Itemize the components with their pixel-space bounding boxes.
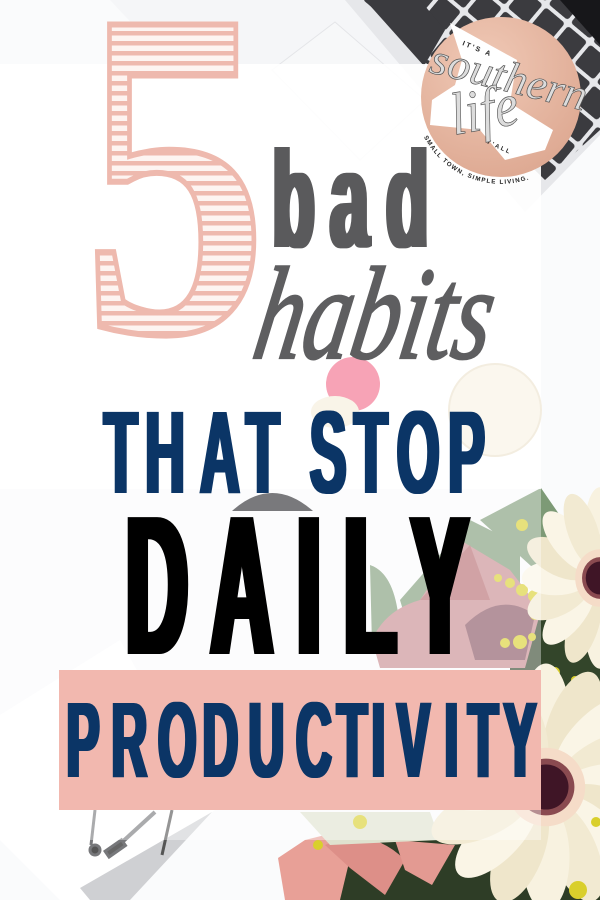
state silhouette <box>430 23 553 160</box>
notebook lower left <box>0 640 215 900</box>
banner background <box>59 670 541 810</box>
laptop body <box>272 0 600 212</box>
cup <box>449 364 541 456</box>
pink lilies bottom <box>278 812 455 900</box>
yellow accents <box>313 815 600 899</box>
logo text: southern <box>426 34 593 120</box>
laptop keyboard <box>362 0 600 180</box>
macaron <box>326 357 380 411</box>
large gerbera <box>423 664 600 900</box>
leaves <box>370 488 570 668</box>
macaron cream <box>311 396 359 428</box>
yellow goldenrod <box>494 519 579 684</box>
translucent white overlay <box>0 64 541 840</box>
dark foliage right <box>510 600 600 700</box>
pink flowers <box>372 540 541 668</box>
word: bad: bad <box>272 123 428 277</box>
overlay inner whitening upper <box>0 64 541 489</box>
logo circle <box>421 17 581 177</box>
logo text: SMALL TOWN, SIMPLE LIVING. <box>424 136 528 184</box>
logo text: Y'ALL <box>485 139 512 156</box>
grey mug <box>232 493 313 511</box>
word: habits script: habits <box>245 241 507 387</box>
logo badge <box>421 17 593 184</box>
top gerbera <box>522 487 600 669</box>
flowers <box>278 487 600 900</box>
heading: that stop: THAT STOP <box>104 387 485 519</box>
glasses <box>90 810 172 857</box>
laptop trackpad <box>272 22 425 160</box>
logo text: life <box>445 71 523 148</box>
banner: productivity <box>59 670 541 810</box>
laptop screen edge <box>560 0 600 45</box>
logo text: IT'S A <box>461 40 493 59</box>
grey notebook cover corner <box>80 812 212 900</box>
logo text <box>424 34 593 184</box>
top desk tint <box>110 0 600 64</box>
heading: daily: DAILY <box>126 475 468 697</box>
laptop space bar <box>365 0 445 66</box>
bottom foliage <box>285 838 600 900</box>
banner text: PRODUCTIVITY <box>67 679 537 800</box>
